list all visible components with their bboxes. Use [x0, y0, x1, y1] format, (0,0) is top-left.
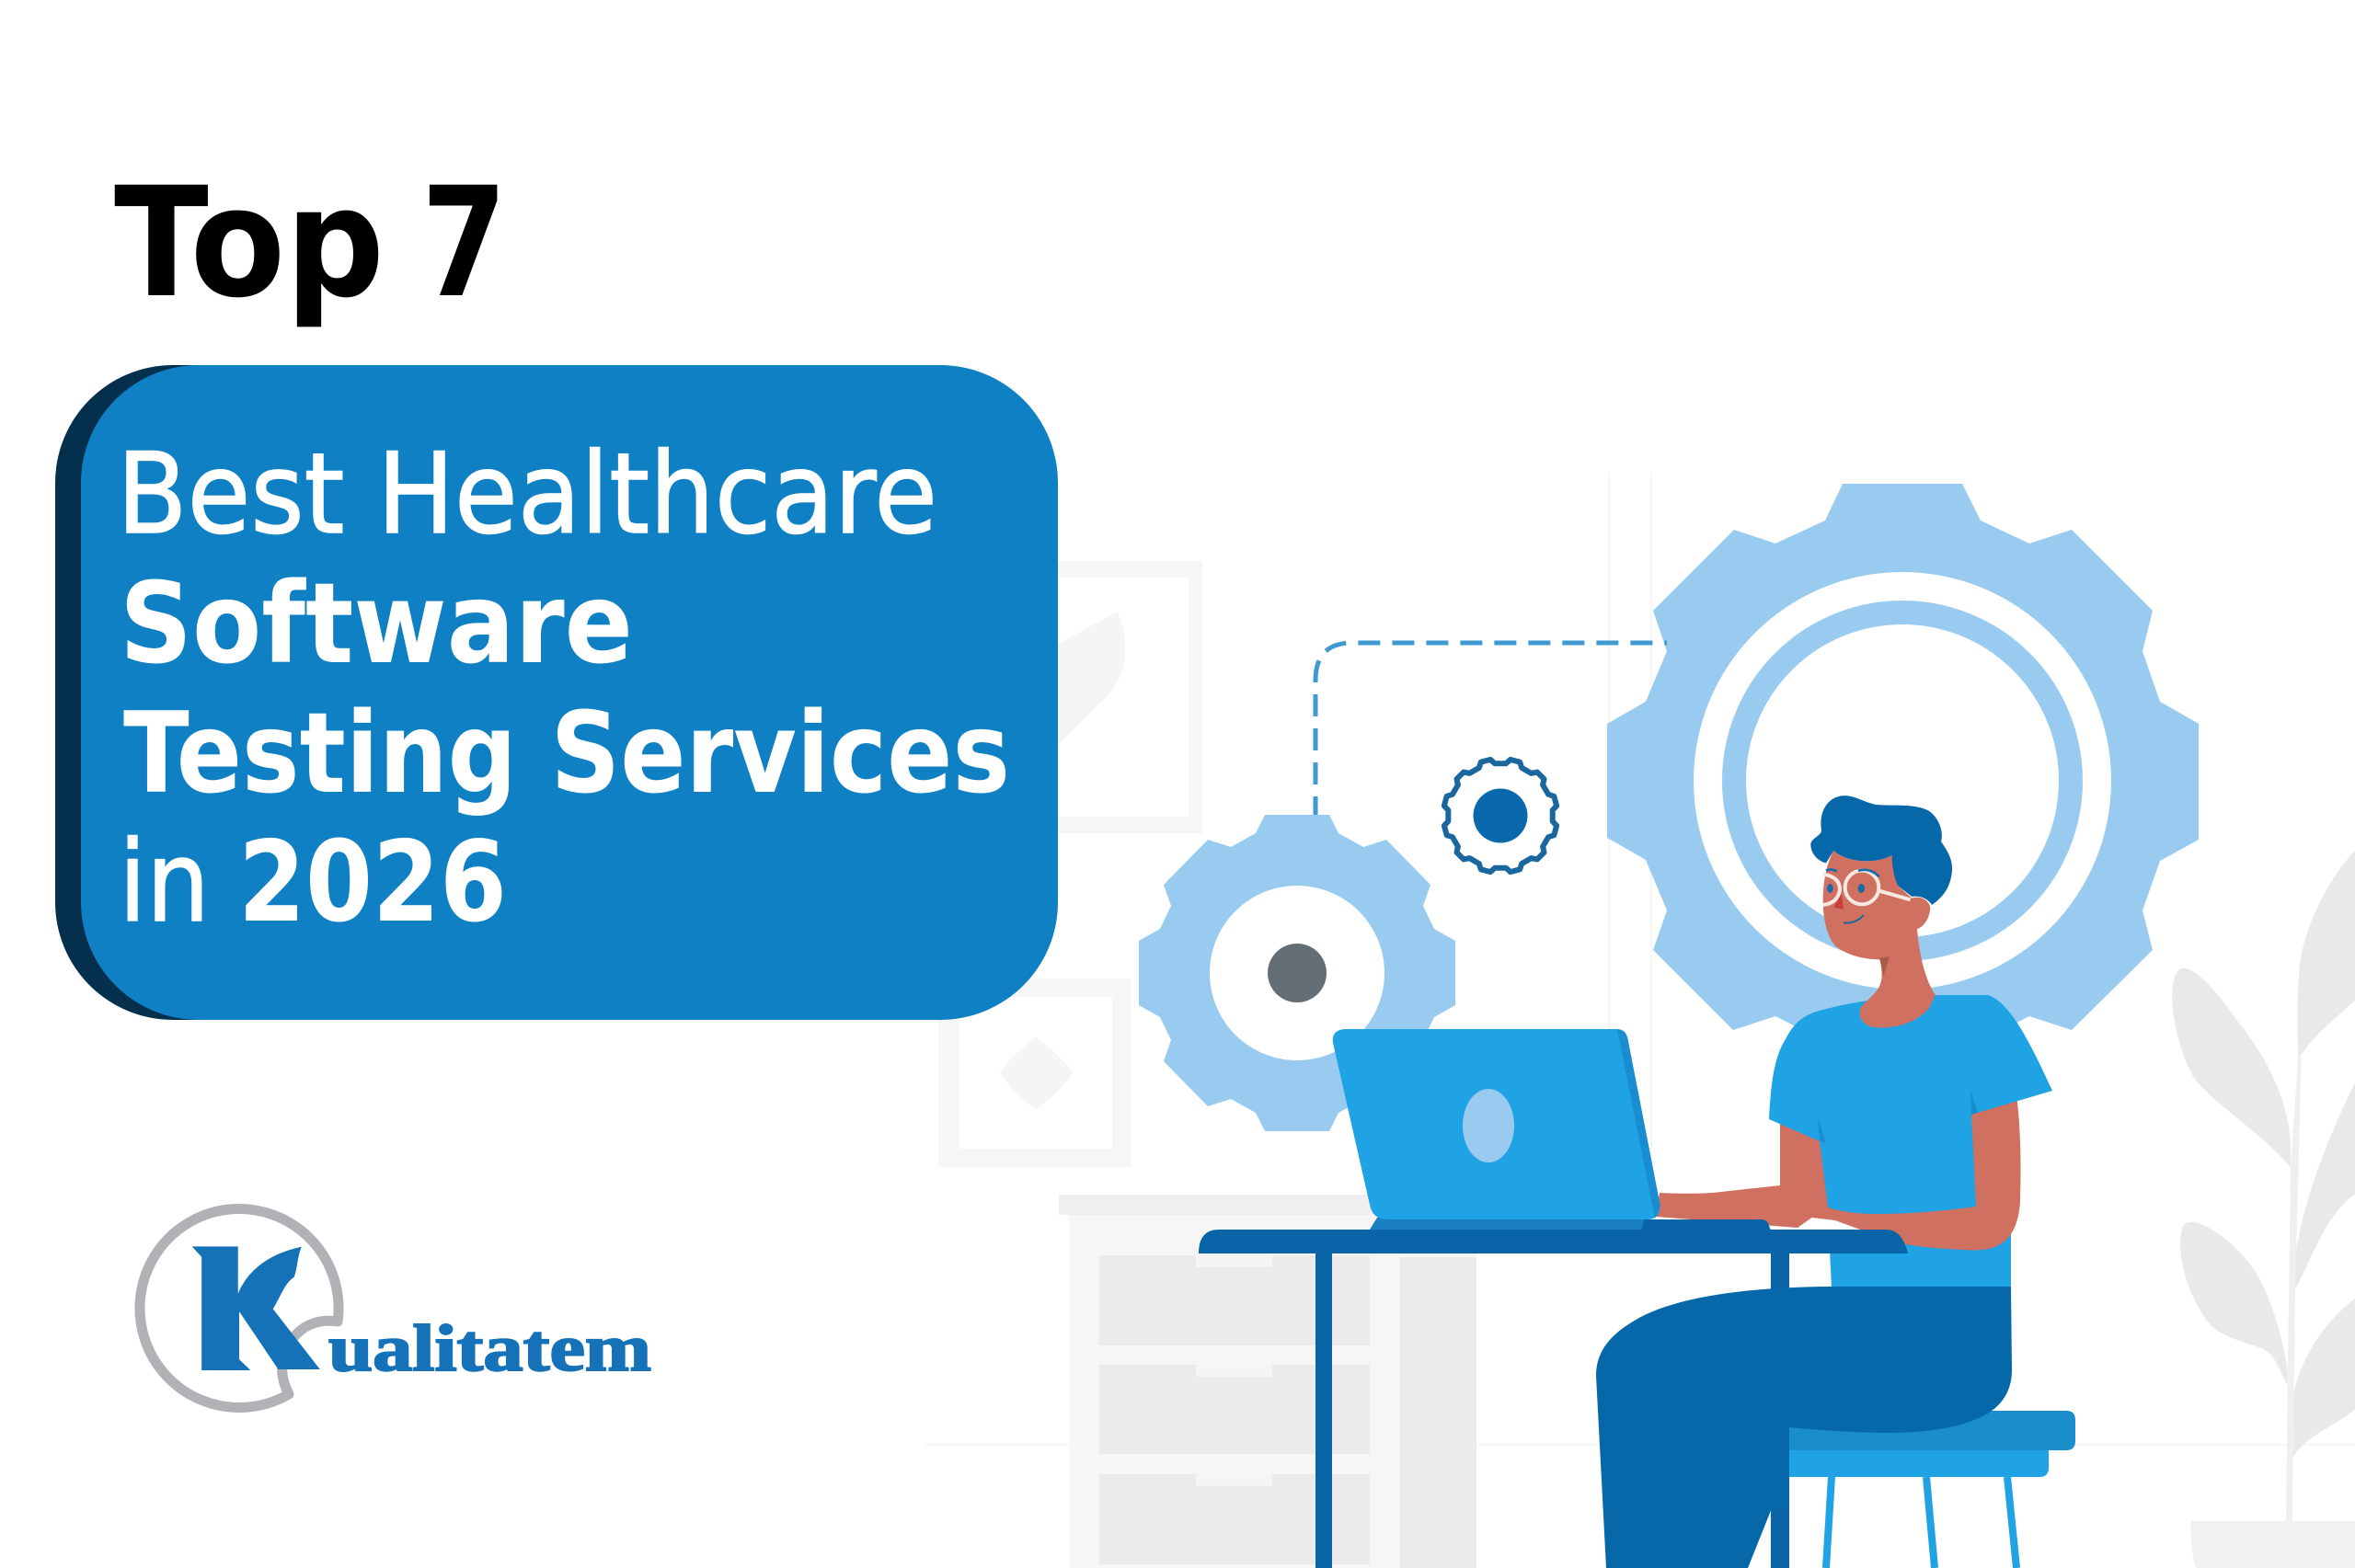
neck shadow	[1879, 956, 1890, 977]
background cabinet	[1059, 1195, 1476, 1568]
laptop edge	[1617, 1029, 1660, 1219]
desk rear leg lower	[1771, 1508, 1789, 1568]
logo wordmark: ualitatem	[328, 1311, 651, 1385]
headline line 2: Software	[120, 559, 633, 689]
headline line 4: 2026	[238, 818, 507, 947]
laptop	[1333, 1029, 1660, 1230]
person: sleeve creases	[1818, 1090, 1978, 1143]
skin	[1823, 851, 1936, 1027]
stool seat base	[1789, 1444, 2049, 1477]
panel: headline	[55, 365, 1058, 1020]
desk top	[1199, 1230, 1908, 1253]
person: trousers	[1596, 1287, 2012, 1568]
headline line 4: in	[119, 818, 210, 947]
person: upper shirt	[1769, 995, 2052, 1214]
title: Top 7: Top	[114, 155, 385, 331]
icon: tiny outlined gear	[1444, 760, 1557, 872]
mouth	[1844, 915, 1864, 923]
person: front arm	[1656, 1124, 1840, 1228]
stool	[1743, 1411, 2075, 1568]
person: lower shirt	[1829, 1232, 2011, 1288]
arrow: dashed connector	[1315, 643, 1667, 818]
desk legs	[1315, 1253, 1332, 1568]
logo letter K	[193, 1247, 318, 1369]
laptop screen	[1333, 1029, 1660, 1219]
background plant	[2172, 851, 2355, 1568]
headline line 4	[119, 818, 507, 947]
hair	[1810, 795, 1952, 905]
person	[1656, 795, 2052, 1288]
laptop logo	[1463, 1089, 1514, 1162]
eyes	[1827, 884, 1865, 893]
icon: small gear	[1139, 815, 1455, 1131]
faint background room	[920, 474, 2355, 1568]
glasses	[1823, 871, 1911, 905]
background picture frame lower	[938, 979, 1132, 1167]
stool legs	[1743, 1477, 2016, 1568]
headline line 3: Testing Services	[123, 689, 1010, 818]
panel shadow edge	[55, 365, 515, 1020]
person: head and neck	[1810, 795, 1952, 1027]
logo: Kualitatem	[140, 1208, 651, 1407]
nose	[1833, 894, 1844, 910]
stool cushion	[1789, 1411, 2075, 1450]
desk rear leg	[1771, 1253, 1789, 1568]
headline line 1: Best Healthcare	[117, 429, 937, 559]
desk keyboard	[1641, 1219, 1775, 1234]
title: Top 7: 7	[421, 155, 507, 331]
panel blue card	[81, 365, 1058, 1020]
logo ring	[140, 1208, 339, 1407]
icon: large gear	[1607, 484, 2199, 1078]
laptop hinge	[1370, 1218, 1645, 1230]
desk	[1199, 1219, 1908, 1568]
background picture frame upper	[920, 561, 1202, 833]
person: back arm	[1805, 1094, 2021, 1250]
eyebrows	[1826, 869, 1879, 876]
